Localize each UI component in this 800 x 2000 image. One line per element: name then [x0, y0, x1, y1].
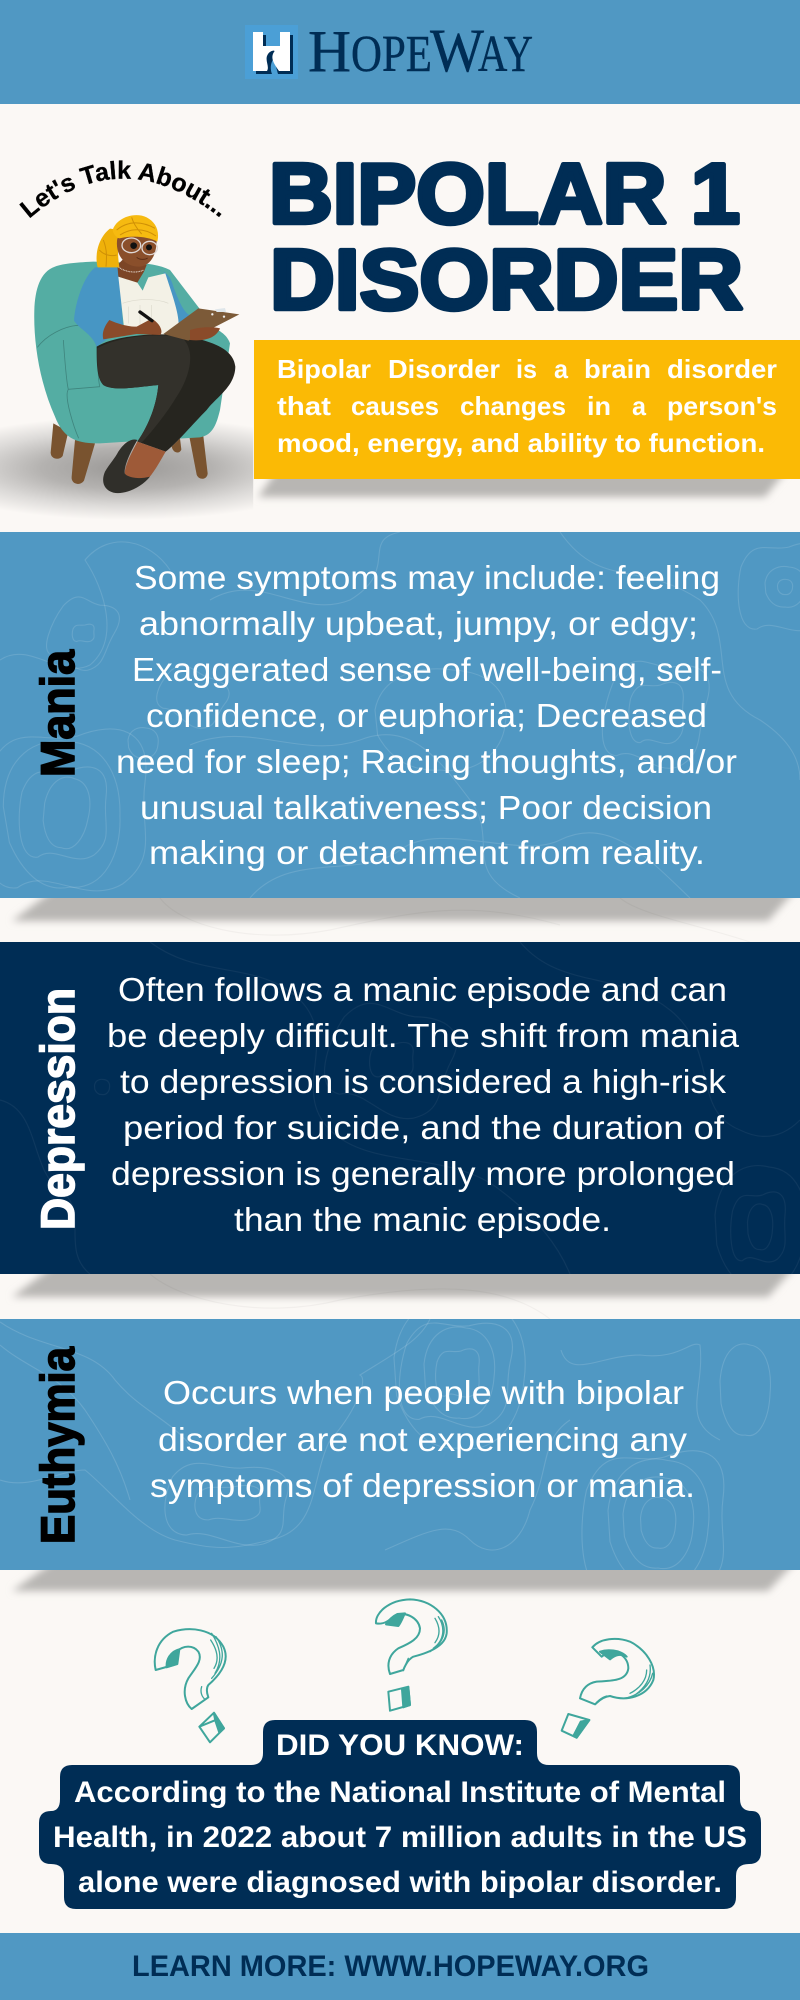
icon: question mark left — [155, 1629, 226, 1742]
blouse — [118, 273, 179, 337]
label: Mania: Mania — [31, 649, 84, 777]
shadow under euthymia panel — [12, 1557, 800, 1591]
hair lock — [97, 229, 121, 267]
definition text — [277, 354, 777, 458]
ankles — [125, 442, 166, 480]
icon: question mark centre — [376, 1599, 447, 1711]
shoes — [103, 439, 150, 493]
shadow under definition box — [258, 466, 790, 497]
definition text: mood, energy, and ability to function. — [277, 428, 765, 458]
mania text: abnormally upbeat, jumpy, or edgy; — [139, 605, 698, 642]
panel: mania — [0, 532, 800, 898]
arm and hand — [103, 319, 161, 339]
depression text: depression is generally more prolonged — [111, 1155, 735, 1192]
label: Depression: Depression — [31, 988, 84, 1230]
footer text: LEARN MORE: WWW.HOPEWAY.ORG — [132, 1950, 649, 1983]
panel: euthymia — [0, 1319, 800, 1570]
mania text: making or detachment from reality. — [149, 834, 705, 871]
definition text: a — [632, 391, 647, 421]
mania text: unusual talkativeness; Poor decision — [140, 789, 712, 826]
eyes — [130, 242, 152, 250]
clipboard — [163, 308, 239, 341]
mania text: need for sleep; Racing thoughts, and/or — [116, 743, 737, 780]
curved text: Let's Talk About: Let's Talk About... — [19, 160, 222, 218]
mania text: Exaggerated sense of well-being, self- — [132, 651, 722, 688]
mouth — [137, 257, 148, 259]
other hand — [190, 327, 220, 340]
definition text: causes — [351, 391, 439, 421]
footer band — [0, 1933, 800, 2000]
callout text: alone were diagnosed with bipolar disorder. — [78, 1866, 722, 1899]
depression text: than the manic episode. — [234, 1201, 611, 1238]
logo mark — [245, 25, 298, 79]
icon: question mark right — [562, 1639, 654, 1738]
definition text: disorder — [667, 354, 777, 384]
jacket — [74, 267, 189, 347]
definition text: person's — [667, 391, 777, 421]
callout: did you know — [39, 1720, 761, 1909]
title line 1: BIPOLAR 1 — [269, 147, 740, 242]
definition text: Bipolar — [277, 354, 371, 384]
callout text — [53, 1776, 747, 1899]
shadow under depression panel — [12, 1261, 800, 1297]
mania text — [116, 559, 737, 871]
title line 2: DISORDER — [270, 233, 743, 328]
mania text: Some symptoms may include: feeling — [134, 559, 720, 596]
header band — [0, 0, 800, 104]
floor shadow — [0, 424, 254, 516]
euthymia text: symptoms of depression or mania. — [150, 1467, 695, 1504]
euthymia text — [150, 1374, 695, 1504]
definition text: is — [516, 354, 537, 384]
definition box — [254, 340, 800, 479]
callout text: Health, in 2022 about 7 million adults in the US — [53, 1821, 747, 1854]
title — [269, 147, 743, 328]
definition text: Disorder — [388, 354, 500, 384]
mania text: confidence, or euphoria; Decreased — [146, 697, 707, 734]
face — [116, 236, 157, 266]
logo wordmark: H — [308, 18, 351, 84]
label: Euthymia: Euthymia — [31, 1346, 84, 1544]
depression text: Often follows a manic episode and can — [118, 971, 727, 1008]
euthymia text: Occurs when people with bipolar — [163, 1374, 684, 1411]
shadow under mania panel — [12, 885, 800, 921]
definition text: a — [554, 354, 569, 384]
chair legs — [51, 423, 208, 484]
depression text: period for suicide, and the duration of — [123, 1109, 725, 1146]
depression text — [107, 971, 740, 1238]
trousers — [97, 334, 235, 452]
glasses — [122, 238, 157, 255]
logo wordmark: OPE — [351, 26, 432, 83]
chair — [34, 262, 230, 443]
euthymia text: disorder are not experiencing any — [158, 1421, 688, 1458]
logo wordmark: W — [430, 18, 484, 85]
panel: depression — [0, 942, 800, 1288]
neck — [117, 258, 147, 283]
illustration: woman in teal armchair — [0, 215, 253, 520]
logo: HopeWay — [245, 18, 533, 85]
callout heading: DID YOU KNOW: — [276, 1729, 524, 1762]
depression text: be deeply difficult. The shift from mania — [107, 1017, 740, 1054]
callout text: According to the National Institute of Mental — [74, 1776, 726, 1809]
logo wordmark: AY — [478, 26, 533, 83]
definition text: brain — [584, 354, 651, 384]
definition text: that — [277, 391, 331, 421]
necklace — [117, 266, 144, 272]
pen — [140, 312, 152, 321]
hair — [113, 215, 158, 242]
definition text: in — [587, 391, 611, 421]
definition text: changes — [460, 391, 566, 421]
depression text: to depression is considered a high-risk — [120, 1063, 727, 1100]
